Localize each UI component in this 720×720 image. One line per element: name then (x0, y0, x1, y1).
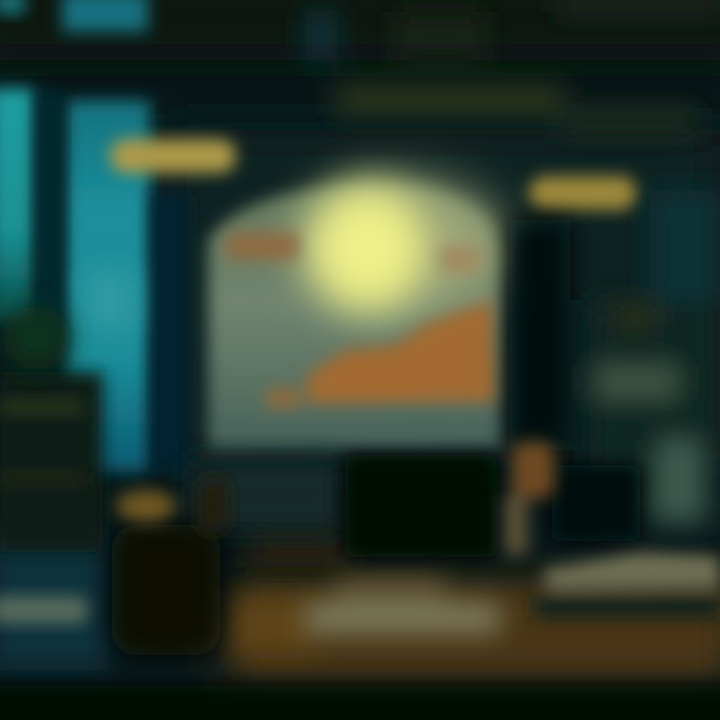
ceiling beams (305, 0, 720, 134)
window: cyan panes (0, 0, 188, 472)
desk surface (190, 460, 720, 675)
left stack and plant (0, 306, 108, 670)
monitor: center (345, 455, 497, 557)
right shelves (510, 190, 720, 530)
ceiling lamp: right (529, 176, 637, 210)
books: right of desk (535, 552, 720, 617)
light glow (284, 160, 452, 336)
ceiling lamp: left (110, 139, 236, 173)
orange chart shape (226, 232, 496, 408)
monitor: right (552, 465, 640, 541)
chair: orange accent (504, 442, 554, 555)
floor shadow (0, 686, 720, 720)
desk papers (305, 578, 500, 634)
foreground figure (112, 478, 228, 655)
wall poster (208, 160, 505, 450)
